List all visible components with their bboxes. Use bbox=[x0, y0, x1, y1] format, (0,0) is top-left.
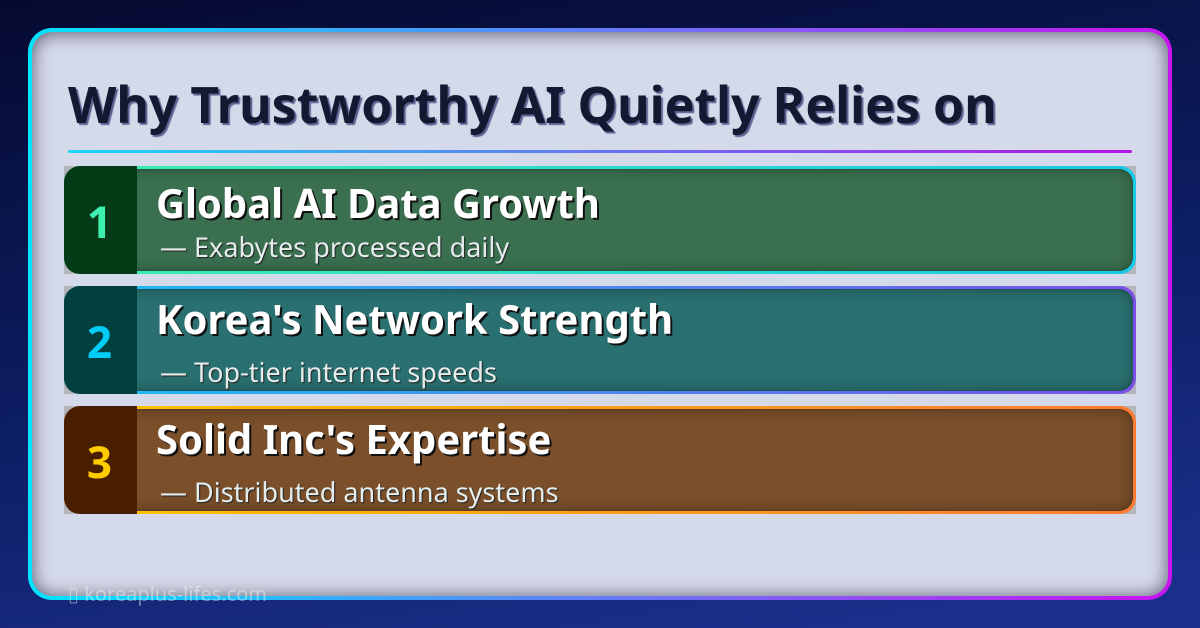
number 1: 1 bbox=[87, 191, 112, 251]
text: exabytes: — Exabytes processed daily bbox=[160, 228, 509, 265]
text: antenna: — Distributed antenna systems bbox=[160, 473, 559, 510]
text: speeds: — Top-tier internet speeds bbox=[160, 353, 497, 390]
title: Why Trustworthy AI Quietly Relies on bbox=[68, 70, 997, 138]
heading: Global AI Data Growth: Global AI Data Growth bbox=[156, 175, 600, 230]
divider bbox=[68, 150, 1132, 153]
heading: Korea's Network Strength: Korea's Network Strength bbox=[156, 291, 673, 346]
panel: row 2 bbox=[64, 286, 1136, 394]
panel: row 1 bbox=[64, 166, 1136, 274]
heading: Solid Inc's Expertise: Solid Inc's Expertise bbox=[156, 411, 551, 466]
footer watermark: ▯ koreaplus-lifes.com bbox=[68, 580, 267, 607]
number 3: 3 bbox=[87, 431, 112, 491]
number 2: 2 bbox=[87, 311, 112, 371]
panel: row 3 bbox=[64, 406, 1136, 514]
